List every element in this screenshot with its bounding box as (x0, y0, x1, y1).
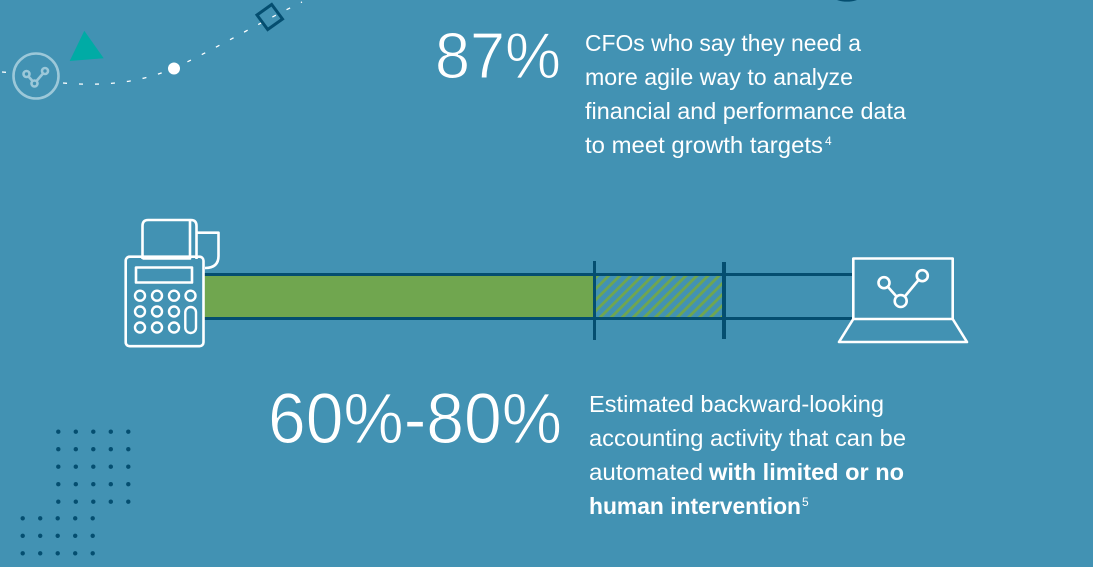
stat: 60%-80%: 60%-80% (268, 380, 562, 459)
text block: automation statistic: 5 (802, 495, 809, 509)
text block: CFOs statistic: financial and performance data (585, 98, 906, 124)
top edge shape (835, 0, 859, 2)
text block: automation statistic: accounting activity that can be (589, 425, 906, 451)
icon: adding machine (126, 220, 218, 346)
bar: solid green segment (204, 276, 594, 317)
text block: automation statistic: Estimated backward-looking (589, 391, 884, 417)
icon: outlined diamond (257, 4, 282, 30)
text block: automation statistic (589, 391, 906, 519)
text block: automation statistic: automated (589, 459, 703, 485)
bar: hatched segment (596, 276, 723, 317)
text block: automation statistic: human intervention (589, 493, 801, 519)
text block: automation statistic: with limited or no (708, 459, 904, 485)
text block: CFOs statistic (585, 30, 906, 158)
stat: 87%: 87% (435, 19, 561, 92)
icon: teal triangle (70, 31, 104, 61)
text block: CFOs statistic: more agile way to analyze (585, 64, 853, 90)
decorative dot grids (20, 430, 130, 556)
dashed journey path (2, 2, 302, 84)
bar: rails and ticks (204, 261, 854, 340)
text block: CFOs statistic: CFOs who say they need a (585, 30, 861, 56)
icon: journey node circle (14, 54, 58, 98)
text block: CFOs statistic: to meet growth targets (585, 132, 823, 158)
progress bar (204, 261, 854, 340)
text block: CFOs statistic: 4 (825, 134, 832, 148)
icon: white dot (168, 62, 180, 74)
icon: laptop with chart (839, 258, 967, 342)
